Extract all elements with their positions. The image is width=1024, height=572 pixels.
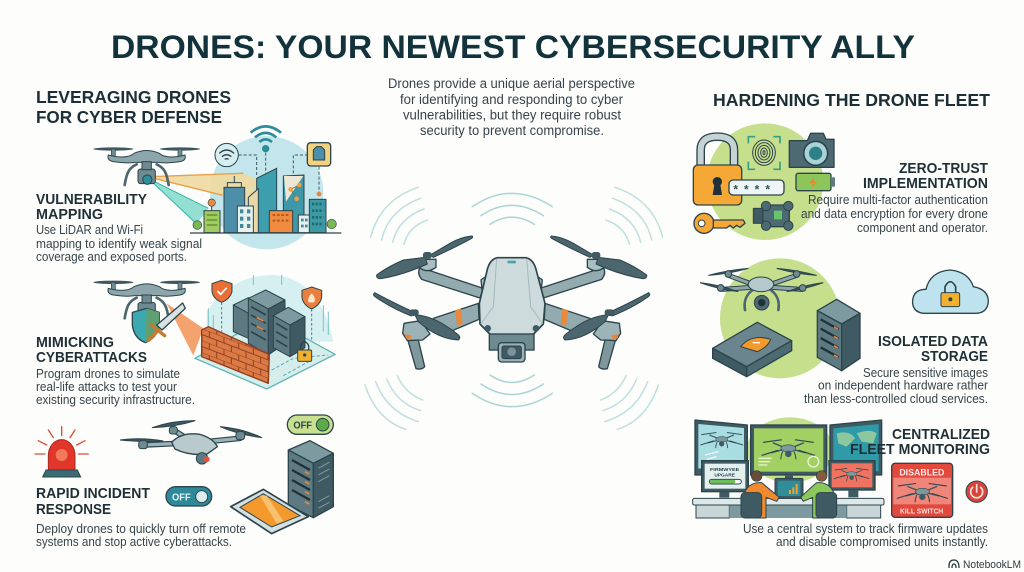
text block: rapid incident response: RAPID INCIDENT (36, 485, 150, 502)
text block: isolated data storage: ISOLATED DATA (878, 333, 988, 350)
illustration: centralized monitoring station (693, 417, 987, 518)
heading: leveraging drones: FOR CYBER DEFENSE (36, 107, 222, 127)
monitor: firmware upgrade (702, 461, 748, 498)
text block: vulnerability mapping (36, 191, 202, 264)
text block: centralized fleet monitoring: Use a central system to track firmware updates (743, 522, 988, 536)
text block: vulnerability mapping: VULNERABILITY (36, 191, 147, 208)
toggle: teal off (166, 487, 212, 506)
text block: isolated data storage: STORAGE (921, 348, 988, 365)
icon: cloud with lock (913, 270, 988, 313)
text block: zero-trust implementation: ZERO-TRUST (899, 160, 988, 177)
text block: zero-trust implementation: IMPLEMENTATION (863, 175, 988, 192)
text block: mimicking cyberattacks: Program drones to simulate (36, 367, 180, 381)
text block: rapid incident response: RESPONSE (36, 501, 111, 518)
text block: centralized fleet monitoring: CENTRALIZED (892, 426, 990, 443)
text block: vulnerability mapping: coverage and exposed ports. (36, 250, 187, 264)
heading: leveraging drones: LEVERAGING DRONES (36, 87, 231, 107)
icon: secure drive (713, 322, 792, 377)
text block: zero-trust implementation: Require multi-factor authentication (808, 193, 988, 207)
central drone with signal waves (365, 187, 663, 429)
icon: power button (966, 481, 987, 502)
icon: quadcopter (700, 268, 823, 310)
text block: centralized fleet monitoring: FLEET MONITORING (850, 441, 990, 458)
text block: isolated data storage: on independent hardware rather (818, 378, 988, 392)
title: DRONES: YOUR NEWEST CYBERSECURITY ALLY (111, 29, 915, 65)
monitor: left (695, 420, 747, 475)
text block: isolated data storage: than less-controlled cloud services. (804, 392, 988, 406)
icon: key (694, 213, 745, 233)
text block: rapid incident response (36, 485, 246, 549)
laptop (775, 478, 803, 498)
text block: mimicking cyberattacks: existing security infrastructure. (36, 393, 195, 407)
icon: camera (789, 133, 834, 167)
illustration: mimicking cyberattacks (93, 275, 335, 389)
illustration: zero-trust security icons (693, 123, 835, 240)
text block: rapid incident response: systems and stop active cyberattacks. (36, 535, 232, 549)
kill switch panel: KILL SWITCH (900, 508, 943, 515)
icon: battery (796, 173, 835, 191)
icon: drone component (753, 201, 793, 230)
text block: mimicking cyberattacks (36, 334, 195, 407)
monitor: right with map (830, 420, 882, 475)
icon: fingerprint (748, 137, 780, 169)
icon: tablet (231, 489, 308, 534)
password field (729, 180, 784, 196)
intro text: Drones provide a unique aerial perspective (388, 76, 635, 91)
heading: leveraging drones (36, 87, 231, 127)
heading: hardening the drone fleet: HARDENING THE DRONE FLEET (713, 90, 990, 110)
text block: zero-trust implementation (801, 160, 988, 235)
intro text: for identifying and responding to cyber (400, 92, 623, 107)
text block: centralized fleet monitoring: and disable compromised units instantly. (776, 535, 988, 549)
text block: vulnerability mapping: Use LiDAR and Wi-Fi (36, 223, 143, 237)
text block: vulnerability mapping: MAPPING (36, 206, 103, 223)
text block: isolated data storage: Secure sensitive images (863, 366, 988, 380)
text block: zero-trust implementation: and data encryption for every drone (801, 207, 988, 221)
kill switch panel (892, 463, 953, 517)
text block: mimicking cyberattacks: CYBERATTACKS (36, 349, 147, 366)
intro text (388, 76, 635, 138)
illustration: isolated data storage (700, 258, 988, 378)
signal waves (365, 187, 663, 429)
monitor: firmware upgrade: UPGARE (714, 472, 736, 478)
desk (693, 498, 884, 518)
text block: rapid incident response: Deploy drones to quickly turn off remote (36, 522, 246, 536)
text block: isolated data storage (804, 333, 988, 406)
password field: **** (733, 182, 770, 196)
intro text: vulnerabilities, but they require robust (403, 108, 621, 122)
text block: mimicking cyberattacks: real-life attacks to test your (36, 380, 177, 394)
text block: mimicking cyberattacks: MIMICKING (36, 334, 114, 351)
toggle: green off (287, 415, 333, 434)
icon: server rack (817, 299, 860, 371)
icon: padlock (693, 137, 742, 205)
monitor: red alert (829, 461, 875, 497)
NotebookLM watermark: NotebookLM (963, 559, 1021, 571)
text block: centralized fleet monitoring (743, 426, 990, 549)
illustration: vulnerability mapping city scan (93, 126, 341, 249)
kill switch panel: DISABLED (899, 467, 945, 477)
toggle: teal off: OFF (172, 492, 191, 503)
drone body (374, 236, 650, 369)
monitor: center (751, 425, 827, 480)
icon: server rack (288, 441, 333, 518)
intro text: security to prevent compromise. (420, 123, 604, 138)
icon: tilted drone (120, 421, 262, 464)
icon: alarm beacon (35, 427, 88, 477)
text block: vulnerability mapping: mapping to identify weak signal (36, 237, 202, 251)
illustration: rapid incident response (35, 415, 333, 534)
operators (741, 471, 837, 518)
monitor: firmware upgrade: FIRMWYEE (710, 467, 740, 473)
toggle: green off: OFF (293, 421, 312, 432)
text block: zero-trust implementation: component and operator. (857, 221, 988, 235)
